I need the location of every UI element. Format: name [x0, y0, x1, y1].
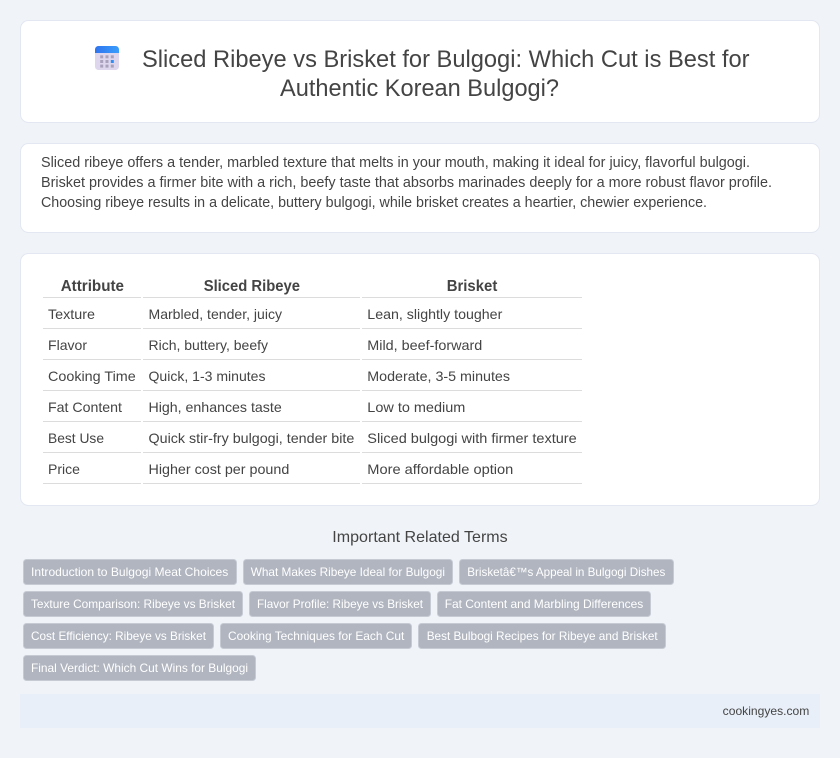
tag — [24, 624, 214, 648]
tag: Best Bulbogi Recipes for Ribeye and Brisket — [427, 629, 658, 643]
tag: Final Verdict: Which Cut Wins for Bulgogi — [31, 661, 248, 675]
row: flavor: Mild, beef-forward — [367, 337, 482, 353]
tag — [24, 592, 242, 616]
panel: comparison table — [20, 254, 820, 506]
table header — [61, 278, 498, 295]
tag: Flavor Profile: Ribeye vs Brisket — [257, 597, 424, 611]
tag — [24, 656, 256, 680]
header panel — [20, 20, 820, 122]
description text: Brisket provides a firmer bite with a rich, beefy taste that absorbs marinades deeply for a more robust flavor profile. — [41, 175, 772, 191]
row: texture: Texture — [48, 306, 95, 322]
table header: Attribute — [61, 278, 124, 295]
row: cooking time: Moderate, 3-5 minutes — [367, 368, 510, 384]
row: price: Price — [48, 461, 80, 477]
row: fat content: Fat Content — [48, 399, 122, 415]
row: price: More affordable option — [367, 461, 513, 477]
row: texture — [48, 306, 503, 322]
tag: Cost Efficiency: Ribeye vs Brisket — [31, 629, 207, 643]
title: Authentic Korean Bulgogi? — [280, 75, 559, 102]
related term tags — [24, 560, 674, 680]
description text — [41, 155, 772, 211]
tag: Texture Comparison: Ribeye vs Brisket — [31, 597, 236, 611]
tag — [220, 624, 412, 648]
tag: Introduction to Bulgogi Meat Choices — [31, 565, 228, 579]
panel: description — [20, 144, 820, 232]
tag — [244, 560, 452, 584]
row: best use — [48, 430, 577, 446]
row: flavor — [48, 337, 482, 353]
row: texture: Lean, slightly tougher — [367, 306, 503, 322]
row: flavor: Rich, buttery, beefy — [148, 337, 268, 353]
heading: important related terms: Important Related Terms — [332, 529, 508, 546]
row: best use: Sliced bulgogi with firmer texture — [367, 430, 577, 446]
icon: calendar — [95, 46, 119, 70]
description text: Choosing ribeye results in a delicate, buttery bulgogi, while brisket creates a heartier, chewier experience. — [41, 195, 707, 211]
row: cooking time — [48, 368, 510, 384]
row: texture: Marbled, tender, juicy — [148, 306, 282, 322]
row: price — [48, 461, 513, 477]
tag: What Makes Ribeye Ideal for Bulgogi — [251, 565, 445, 579]
row: best use: Best Use — [48, 430, 104, 446]
tag — [250, 592, 430, 616]
row: fat content: High, enhances taste — [148, 399, 282, 415]
row: fat content — [48, 399, 465, 415]
row: fat content: Low to medium — [367, 399, 465, 415]
tag: Fat Content and Marbling Differences — [445, 597, 643, 611]
table header: Sliced Ribeye — [204, 278, 300, 295]
tag: Brisketâ€™s Appeal in Bulgogi Dishes — [467, 565, 665, 579]
row: best use: Quick stir-fry bulgogi, tender bite — [148, 430, 355, 446]
footer — [20, 694, 820, 728]
tag — [418, 624, 666, 648]
table header: Brisket — [447, 278, 498, 295]
tag — [438, 592, 650, 616]
row: price: Higher cost per pound — [148, 461, 289, 477]
row: cooking time: Cooking Time — [48, 368, 136, 384]
tag: Cooking Techniques for Each Cut — [228, 629, 405, 643]
tag — [460, 560, 674, 584]
title: Sliced Ribeye vs Brisket for Bulgogi: Which Cut is Best for — [142, 46, 750, 73]
row: cooking time: Quick, 1-3 minutes — [148, 368, 266, 384]
row: flavor: Flavor — [48, 337, 87, 353]
footer source text: cookingyes.com — [723, 704, 809, 718]
title — [142, 46, 750, 102]
tag — [24, 560, 236, 584]
description text: Sliced ribeye offers a tender, marbled texture that melts in your mouth, making it ideal for juicy, flavorful bulgogi. — [41, 155, 750, 171]
